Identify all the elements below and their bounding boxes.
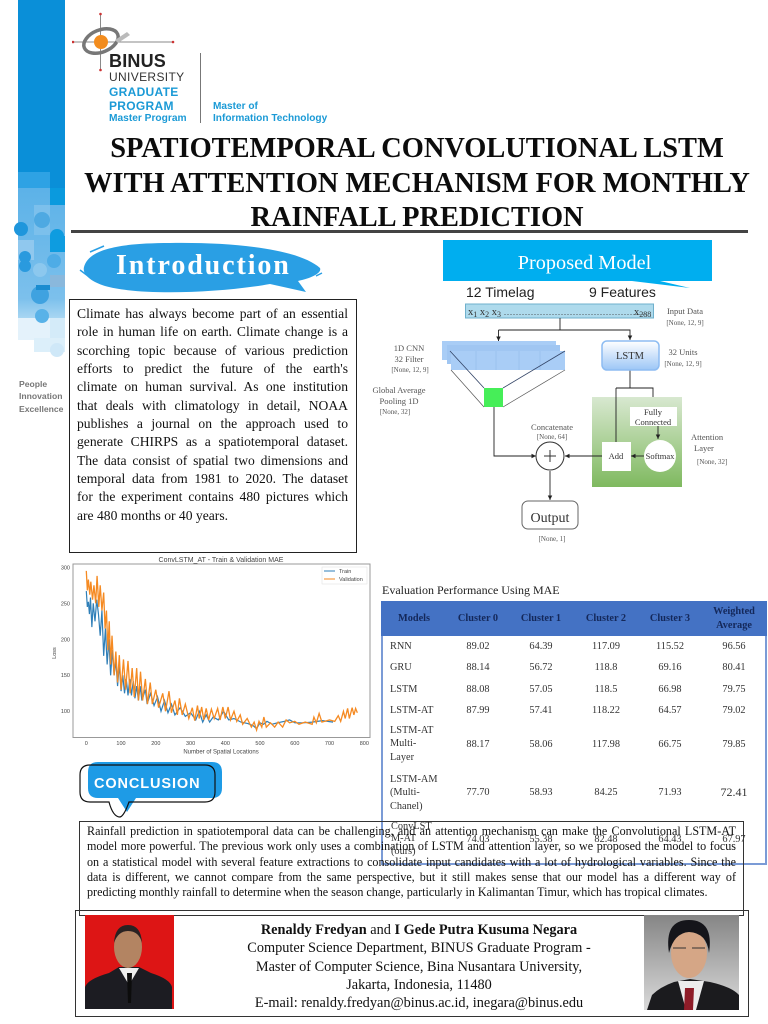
validation line	[86, 571, 357, 730]
legend	[322, 567, 367, 584]
heading: proposed model banner: Proposed Model	[518, 252, 651, 274]
attention layer panel: Softmax	[646, 451, 675, 461]
attention labels	[691, 432, 727, 466]
photo: second author	[644, 915, 739, 1010]
attention labels: [None, 32]	[697, 458, 727, 466]
label: timelag and features: 12 Timelag	[466, 284, 534, 300]
table: evaluation performance	[381, 601, 767, 865]
table rows: 88.14	[466, 662, 490, 673]
table header: Models	[398, 613, 430, 624]
sidebar: blue mosaic band	[14, 0, 65, 357]
attention layer panel	[565, 397, 682, 487]
title	[84, 133, 750, 233]
table rows: Multi-	[390, 738, 416, 749]
heading: conclusion badge	[79, 762, 222, 818]
table header	[398, 606, 755, 631]
y axis	[52, 566, 70, 715]
pooling labels: [None, 32]	[380, 408, 410, 416]
panel: introduction text: generate CHIRPS as a spatiotemporal dataset.	[77, 434, 348, 449]
table rows: 55.38	[529, 834, 553, 845]
y axis: Loss	[52, 647, 58, 659]
table rows: 118.5	[595, 684, 617, 695]
table rows: 58.06	[529, 739, 553, 750]
table rows: 71.93	[658, 787, 682, 798]
table rows: 66.75	[658, 739, 682, 750]
table rows: 84.25	[594, 787, 618, 798]
input data bar: 2	[485, 310, 489, 319]
panel: conclusion text	[79, 821, 744, 916]
table header: Cluster 0	[458, 613, 498, 624]
table rows: 117.09	[592, 641, 620, 652]
CNN labels: 32 Filter	[394, 354, 424, 364]
logo: BINUS University: UNIVERSITY	[109, 70, 185, 84]
table rows: Chanel)	[390, 801, 423, 812]
pooling labels	[373, 385, 426, 416]
x axis: Number of Spatial Locations	[183, 750, 259, 756]
table rows: 115.52	[656, 641, 684, 652]
table rows: 56.72	[529, 662, 553, 673]
table rows: (Multi-	[390, 787, 420, 798]
input data bar: x	[468, 307, 473, 318]
LSTM block: LSTM	[616, 351, 645, 362]
panel: introduction text: are 480 months or 40 years.	[77, 508, 228, 523]
table rows: 96.56	[722, 641, 746, 652]
table rows: LSTM-AT	[390, 725, 433, 736]
input data bar: x	[477, 307, 486, 318]
photo: first author	[85, 915, 174, 1009]
x axis: 200	[151, 741, 160, 747]
table header: Average	[716, 620, 752, 631]
table header: Weighted	[713, 606, 755, 617]
train line	[86, 591, 333, 729]
table rows: 118.22	[592, 705, 620, 716]
heading: proposed model banner	[443, 240, 712, 288]
table header: Cluster 3	[650, 613, 690, 624]
table rows: 64.43	[658, 834, 682, 845]
x axis: 400	[221, 741, 230, 747]
title rule	[71, 230, 748, 233]
logo: BINUS University: BINUS	[109, 51, 166, 71]
chart: train and validation MAE	[52, 556, 370, 756]
attention labels: Attention	[691, 432, 724, 442]
y axis: 250	[61, 602, 70, 608]
chart title: ConvLSTM_AT - Train & Validation MAE	[159, 557, 284, 564]
logo: BINUS University: Master Program	[109, 113, 187, 124]
panel: authors	[75, 910, 749, 1017]
table rows: 80.41	[722, 662, 746, 673]
table rows: M-AT	[391, 833, 416, 844]
table rows: 89.02	[466, 641, 490, 652]
author text: Master of Computer Science, Bina Nusantara University,	[256, 959, 582, 975]
input data bar: ................................................	[501, 308, 648, 317]
panel: introduction text: The data consist of spatial two dimensions and	[77, 453, 348, 468]
table header: Cluster 1	[521, 613, 561, 624]
heading: conclusion badge: CONCLUSION	[94, 776, 200, 792]
table rows: RNN	[390, 641, 412, 652]
diagram: proposed model architecture	[372, 284, 727, 543]
logo: BINUS University	[72, 12, 328, 124]
table rows: 79.02	[722, 705, 746, 716]
panel: introduction text: for the experiment contains 480 pictures which	[77, 489, 348, 504]
input data bar: 288	[639, 310, 651, 319]
LSTM block	[602, 341, 659, 370]
table rows: 64.39	[529, 641, 553, 652]
table rows: 66.98	[658, 684, 682, 695]
panel: introduction text	[69, 299, 357, 553]
table rows: LSTM	[390, 684, 417, 695]
table rows: Layer	[390, 752, 414, 763]
logo: BINUS University: PROGRAM	[109, 99, 174, 113]
panel: introduction text: scorching topic because of various prediction	[77, 343, 348, 358]
input data bar	[466, 304, 654, 319]
table rows: (ours)	[391, 846, 416, 857]
panel: conclusion text: predicting monthly rainfall to determine when the season change, particularly in Kalimantan Timur, which has tropical climates.	[87, 885, 708, 899]
table rows: 72.41	[720, 785, 748, 799]
panel: introduction text: publishes a journal on the approach used to	[77, 416, 348, 431]
logo: BINUS University: Information Technology	[213, 113, 327, 124]
LSTM labels: 32 Units	[668, 347, 698, 357]
x axis: 700	[325, 741, 334, 747]
output shape: [None, 1]	[539, 535, 565, 543]
panel: introduction text: temporal data from 1981 to 2020. The dataset	[77, 471, 348, 486]
x axis: 0	[85, 741, 88, 747]
table rows: 64.57	[658, 705, 682, 716]
author text	[247, 922, 591, 1011]
logo: BINUS University: Master of	[213, 101, 258, 112]
author text: Computer Science Department, BINUS Graduate Program -	[247, 940, 591, 956]
pooling labels: Global Average	[373, 385, 426, 395]
panel: conclusion text: on a statistical model with several feature extractions to consolidate input candidates with a lot of hydrological variables. Since the	[87, 855, 736, 869]
input data bar: 3	[497, 310, 501, 319]
panel: introduction text: that deals with climatology in detail, NOAA	[77, 398, 348, 413]
tagline: people innovation excellence: People	[19, 379, 47, 389]
pooling labels: Pooling 1D	[380, 396, 418, 406]
panel: introduction text: climate on human survival. As one institution	[77, 379, 348, 394]
tagline: people innovation excellence	[19, 379, 64, 414]
table rows: ConvLST	[391, 821, 432, 832]
LSTM labels	[664, 347, 702, 368]
connectors	[494, 318, 653, 500]
x axis: 800	[360, 741, 369, 747]
CNN labels: [None, 12, 9]	[391, 366, 429, 374]
y axis: 300	[61, 566, 70, 572]
x axis: 500	[255, 741, 265, 747]
tagline: people innovation excellence: Excellence	[19, 404, 63, 414]
panel: conclusion text: Rainfall prediction in spatiotemporal data can be challenging, and an attention mechanism can make the Convolutional LSTM-AT	[87, 824, 736, 838]
panel: conclusion text: data is different, we cannot compare from the same perspective, but it still makes sense that our model has a different way of	[87, 870, 736, 884]
table rows: 118.8	[595, 662, 617, 673]
table rows: 117.98	[592, 739, 620, 750]
concatenate label	[531, 422, 573, 441]
y axis: 150	[61, 673, 70, 679]
attention labels: Layer	[694, 443, 714, 453]
concatenate label: Concatenate	[531, 422, 573, 432]
table rows: 79.75	[722, 684, 746, 695]
x axis: 300	[186, 741, 195, 747]
y axis: 100	[61, 709, 70, 715]
table rows: 88.08	[466, 684, 490, 695]
logo: BINUS University: GRADUATE	[109, 85, 179, 99]
input data label	[666, 306, 704, 327]
x axis: 100	[116, 741, 126, 747]
x axis	[85, 741, 369, 756]
table rows: 57.41	[529, 705, 553, 716]
table rows: 87.99	[466, 705, 490, 716]
CNN labels	[391, 343, 429, 374]
pooling square	[484, 388, 503, 407]
input data bar: x	[489, 307, 498, 318]
label: timelag and features: 9 Features	[589, 284, 656, 300]
title: SPATIOTEMPORAL CONVOLUTIONAL LSTM	[110, 133, 724, 164]
input data bar: 1	[473, 310, 477, 319]
LSTM labels: [None, 12, 9]	[664, 360, 702, 368]
author text: Renaldy Fredyan and I Gede Putra Kusuma Negara	[261, 922, 577, 938]
author text: E-mail: renaldy.fredyan@binus.ac.id, inegara@binus.edu	[255, 995, 583, 1011]
attention layer panel: Add	[609, 451, 624, 461]
title: RAINFALL PREDICTION	[250, 202, 584, 233]
1D CNN stack	[442, 341, 565, 407]
x axis: 600	[290, 741, 299, 747]
output box	[522, 501, 578, 529]
table rows: LSTM-AM	[390, 774, 437, 785]
table rows: GRU	[390, 662, 412, 673]
table rows: 82.48	[594, 834, 618, 845]
panel: conclusion text: model more powerful. The previous work only uses a combination of LSTM and attention layer, so we proposed the model to focus	[87, 839, 736, 853]
output box: Output	[531, 511, 570, 526]
CNN labels: 1D CNN	[394, 343, 424, 353]
table rows: 57.05	[529, 684, 553, 695]
table rows: 88.17	[466, 739, 490, 750]
y axis: 200	[61, 638, 70, 644]
panel: introduction text: Climate has always become part of an essential	[77, 306, 348, 321]
table rows: LSTM-AT	[390, 705, 433, 716]
legend: Validation	[339, 577, 363, 583]
panel: introduction text: role in human life on earth. Climate change is a	[77, 324, 348, 339]
heading: introduction badge: Introduction	[116, 250, 291, 281]
tagline: people innovation excellence: Innovation	[19, 391, 62, 401]
attention layer panel: Fully	[644, 407, 663, 417]
heading: introduction badge	[80, 242, 322, 292]
input data label: [None, 12, 9]	[666, 319, 704, 327]
table rows: 74.03	[466, 834, 490, 845]
title: WITH ATTENTION MECHANISM FOR MONTHLY	[84, 168, 750, 198]
concatenate label: [None, 64]	[537, 433, 567, 441]
author text: Jakarta, Indonesia, 11480	[346, 977, 492, 993]
table rows: 79.85	[722, 739, 746, 750]
table rows: 69.16	[658, 662, 682, 673]
input data bar: x	[634, 307, 639, 318]
table caption: Evaluation Performance Using MAE	[382, 583, 560, 597]
concatenate symbol	[536, 442, 564, 470]
table rows: 58.93	[529, 787, 553, 798]
table rows: 67.97	[722, 834, 746, 845]
table rows: 77.70	[466, 787, 490, 798]
attention layer panel: Connected	[635, 417, 672, 427]
input data label: Input Data	[667, 306, 703, 316]
legend: Train	[339, 569, 351, 575]
label: timelag and features	[466, 284, 656, 300]
panel: introduction text: efforts to predict the future of the earth's	[77, 361, 348, 376]
table header: Cluster 2	[586, 613, 626, 624]
